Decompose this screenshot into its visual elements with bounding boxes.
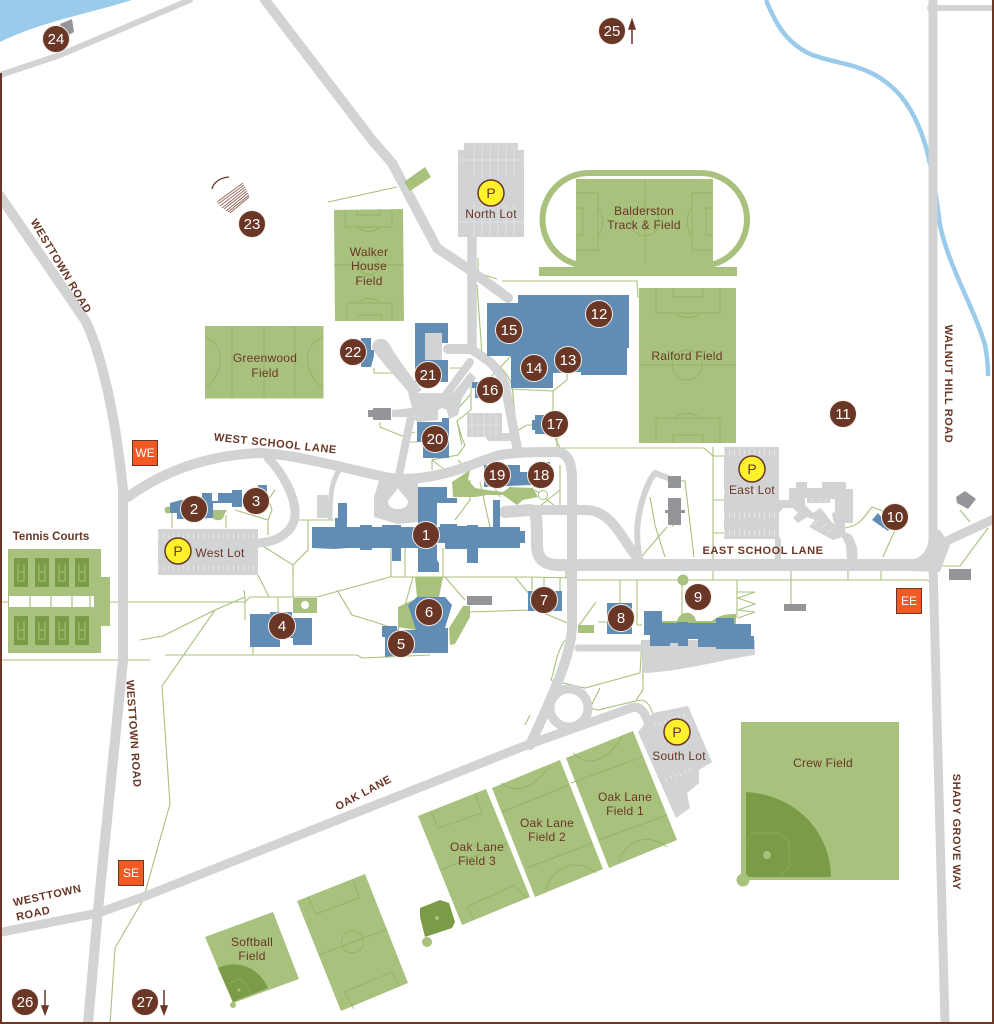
label track: Track & Field [607,218,681,232]
marker 7 [530,586,558,614]
marker 17: 17 [547,416,563,433]
marker 2 [180,496,208,522]
marker 14: 14 [526,360,542,377]
building: 10 [872,513,890,531]
marker 15 [496,316,522,344]
marker 13 [554,346,582,374]
marker 25: 25 [604,23,620,40]
arrow: marker 27 down [161,990,167,1014]
label track: Balderston [614,204,674,218]
parking marker south: P [672,724,682,740]
marker 22 [340,338,366,366]
marker 15: 15 [501,322,517,339]
building: 9 [644,611,754,649]
marker 20: 20 [427,431,443,448]
marker 24 [42,26,70,52]
small lots and service areas [317,413,858,562]
marker 12: 12 [591,306,607,323]
road labels: OAK LANE [333,774,394,813]
parking marker east: P [747,461,757,477]
marker 26: 26 [17,994,33,1011]
marker 25 [598,18,626,44]
marker 27 [132,988,158,1016]
road hub, junctions and teardrop loop [372,333,950,673]
marker 3 [242,488,270,514]
label tennis: Tennis Courts [13,531,89,543]
label east lot: East Lot [729,483,775,497]
label field 3: Field 3 [458,854,496,868]
label west lot: West Lot [195,546,245,560]
green access strip [404,167,431,191]
marker 19: 19 [489,467,505,484]
label greenwood: Field [251,366,279,380]
building: 21 [415,323,448,382]
parking marker west: P [173,543,183,559]
marker 14 [520,354,548,382]
building: 2 and 3 [170,485,267,519]
building: 18 and 19 [484,462,550,510]
raiford field [639,288,736,443]
label field 2: Field 2 [528,830,566,844]
gate markers [118,440,922,886]
marker 10 [882,504,908,530]
gate WE: WE [135,446,155,460]
marker 18: 18 [533,467,549,484]
road labels: EAST SCHOOL LANE [702,545,824,557]
arrow: marker 25 up [629,20,635,44]
marker 9: 9 [694,589,702,606]
marker 20 [422,426,448,452]
green courtyards [164,470,736,645]
marker 17 [542,410,568,438]
label softball: Softball [231,935,273,949]
marker 4 [268,612,296,640]
track and field [539,173,747,276]
marker 27: 27 [137,994,153,1011]
marker 23: 23 [244,216,260,233]
marker 7: 7 [540,592,548,609]
building: 5 and 6 [382,597,452,657]
road labels: SHADY GROVE WAY [950,774,962,890]
gate WE [132,440,158,466]
tennis courts [8,531,110,653]
marker 6: 6 [425,604,433,621]
label south lot: South Lot [652,749,706,763]
label field 1: Field 1 [606,804,644,818]
marker 21 [414,362,442,388]
greenwood field [205,326,324,398]
crew field [736,722,899,886]
oak lane field 2 [492,760,603,897]
road labels: WESTTOWN [12,883,83,909]
building: 22 [361,338,374,367]
marker 24: 24 [48,31,64,48]
gate EE: EE [901,594,917,608]
marker 11 [830,400,856,428]
marker 6 [416,598,442,626]
gate SE [118,860,144,886]
marker 8 [608,604,634,632]
arrow: marker 26 down [42,990,48,1014]
label field 1: Oak Lane [598,790,652,804]
marker 13: 13 [560,352,576,369]
label softball: Field [238,949,266,963]
label north lot: North Lot [465,207,517,221]
marker 1 [412,522,440,548]
oak lane field 3 [418,789,530,925]
marker 8: 8 [617,610,625,627]
walker house field [334,209,404,321]
south lot [638,706,712,818]
building: 4 [250,612,312,647]
unnamed soccer field [297,874,408,1011]
label walker: Walker [350,245,388,259]
road labels [12,217,962,924]
marker 16: 16 [482,382,498,399]
marker 21: 21 [420,367,436,384]
east lot [724,447,779,539]
road labels: WEST SCHOOL LANE [213,432,337,456]
label crew: Crew Field [793,756,853,770]
marker 22: 22 [345,344,361,361]
marker 19 [484,462,510,488]
marker 2: 2 [190,501,198,518]
road labels: WESTTOWN ROAD [123,680,143,788]
marker 3: 3 [252,493,260,510]
marker 9 [684,584,712,610]
marker 4: 4 [278,618,286,635]
amphitheatre [212,177,249,213]
label field 2: Oak Lane [520,816,574,830]
marker 23 [238,210,266,238]
marker 10: 10 [887,509,903,526]
marker 18 [528,462,554,488]
marker 11: 11 [835,406,851,423]
gate EE [896,588,922,614]
parking marker north: P [486,185,496,201]
road labels: WESTTOWN ROAD [28,217,93,316]
building: 17 [532,415,547,434]
north lot [458,143,524,237]
label raiford: Raiford Field [651,349,723,363]
road labels: WALNUT HILL ROAD [942,325,954,443]
building: 8 [607,603,632,634]
softball field [205,912,299,1008]
marker 16 [476,376,504,404]
marker 5 [388,630,414,658]
service buildings [60,19,976,611]
building: 12 to 15 [487,295,629,388]
building: main hall [312,487,525,572]
label greenwood: Greenwood [233,351,297,365]
label walker: House [351,259,387,273]
water: pond top left [0,0,132,42]
water: stream east [766,0,988,376]
marker 26 [12,988,38,1016]
building: 20 [417,418,449,458]
building: 7 [528,591,562,611]
marker 5: 5 [397,636,405,653]
road labels: ROAD [15,905,52,924]
oak lane field 1 [566,731,677,868]
small diamond [420,900,455,947]
building: 16 [472,382,480,398]
marker 12 [586,300,612,328]
label field 3: Oak Lane [450,840,504,854]
label walker: Field [355,274,383,288]
gate SE: SE [123,866,139,880]
west lot [158,529,258,575]
marker 1: 1 [422,527,430,544]
